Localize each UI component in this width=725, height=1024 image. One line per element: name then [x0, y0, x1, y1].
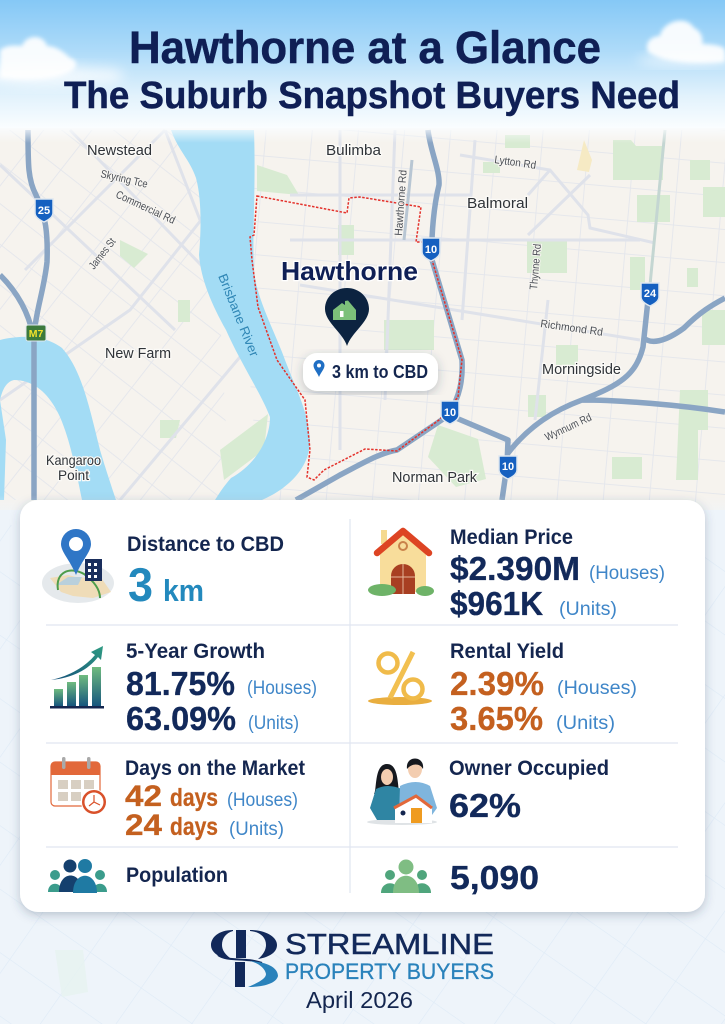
- stat: distance to CBD: km: [163, 573, 204, 608]
- stat: days on the market: (Houses): [227, 790, 298, 811]
- map labels: Bulimba: [326, 142, 382, 159]
- bottom background: [0, 495, 725, 1024]
- location pin: [325, 288, 369, 346]
- stat: days on the market: days: [170, 813, 218, 841]
- highway shields: 10: [425, 244, 437, 256]
- stat: owner occupied: Owner Occupied: [449, 757, 609, 780]
- map labels: Kangaroo: [46, 452, 101, 468]
- stat: distance to CBD: 3: [128, 558, 153, 611]
- stat: distance to CBD: Distance to CBD: [127, 533, 284, 556]
- callout: distance: 3 km to CBD: [332, 361, 428, 382]
- sky header: [0, 0, 725, 128]
- river: [171, 130, 310, 500]
- stat: 5-year growth: 5-Year Growth: [126, 640, 265, 663]
- stat: median price: Median Price: [450, 526, 573, 549]
- stat: median price: $961K: [450, 585, 543, 622]
- stat: 5-year growth: 81.75%: [126, 665, 235, 702]
- stat: distance to CBD: [42, 529, 284, 611]
- highway shields: M7: [29, 328, 43, 340]
- cloud left: [0, 37, 124, 87]
- logo wordmark: PROPERTY BUYERS: [285, 959, 494, 984]
- title: The Suburb Snapshot Buyers Need: [64, 75, 680, 117]
- map labels: Morningside: [542, 361, 621, 378]
- stat: population label: Population: [126, 864, 228, 887]
- highway shields: 10: [502, 461, 514, 473]
- stat: days on the market: Days on the Market: [125, 757, 305, 780]
- stat: owner occupied: 62%: [449, 787, 521, 824]
- date: April 2026: [306, 987, 413, 1013]
- stat: days on the market: [51, 757, 305, 842]
- highway shields: 10: [444, 407, 456, 419]
- map labels: [46, 142, 621, 486]
- panel: statistics card: [20, 500, 705, 912]
- map labels: Richmond Rd: [540, 318, 604, 339]
- stat: population label: [48, 859, 228, 893]
- map labels: Brisbane River: [215, 272, 262, 359]
- second river: [0, 337, 116, 500]
- logo wordmark: [285, 929, 494, 984]
- minor motorway: [650, 130, 665, 285]
- stat: median price: (Houses): [589, 563, 665, 584]
- map labels: Commercial Rd: [114, 189, 177, 227]
- highway shields: 24: [644, 288, 657, 300]
- stat: rental yield: (Units): [556, 713, 615, 734]
- map labels: Point: [58, 467, 89, 483]
- map labels: Lytton Rd: [494, 154, 537, 172]
- highway shields: 25: [38, 205, 50, 217]
- callout: distance: [303, 353, 438, 391]
- logo mark: [211, 930, 278, 987]
- stat: 5-year growth: [50, 640, 317, 737]
- stat: median price: (Units): [559, 599, 617, 620]
- map labels: Norman Park: [392, 469, 477, 486]
- stat: population value: [381, 859, 539, 896]
- map labels: James St: [87, 236, 119, 272]
- map section: [0, 125, 725, 510]
- map labels: Newstead: [87, 142, 152, 159]
- suburb label: Hawthorne: [281, 256, 418, 286]
- suburb boundary: [250, 196, 462, 480]
- map labels: Wynnum Rd: [543, 412, 594, 444]
- cloud right: [637, 21, 725, 66]
- stat: median price: $2.390M: [450, 550, 580, 587]
- stat: median price: [368, 526, 665, 622]
- map labels: Balmoral: [467, 195, 528, 212]
- stat: rental yield: Rental Yield: [450, 640, 564, 663]
- stat: 5-year growth: (Houses): [247, 678, 317, 699]
- title: [64, 22, 680, 117]
- main roads: [0, 130, 655, 500]
- stat: rental yield: 2.39%: [450, 665, 544, 702]
- stat: days on the market: days: [170, 784, 218, 812]
- stat: rental yield: [368, 640, 637, 737]
- parks: [120, 135, 725, 487]
- stat: rental yield: (Houses): [557, 678, 637, 699]
- highway shields: [26, 199, 659, 479]
- stat: rental yield: 3.65%: [450, 700, 543, 737]
- map labels: Skyring Tce: [99, 168, 149, 191]
- stat: 5-year growth: (Units): [248, 713, 299, 734]
- stat: owner occupied: [367, 757, 609, 825]
- highways: [0, 130, 725, 500]
- map labels: Thynne Rd: [528, 243, 544, 290]
- stat: days on the market: (Units): [229, 819, 284, 840]
- stat: days on the market: 24: [125, 809, 162, 842]
- logo wordmark: STREAMLINE: [285, 929, 494, 961]
- title: Hawthorne at a Glance: [129, 22, 601, 73]
- stat: population value: 5,090: [450, 859, 539, 896]
- stat: days on the market: 42: [125, 780, 162, 813]
- stat: 5-year growth: 63.09%: [126, 700, 236, 737]
- map labels: New Farm: [105, 345, 171, 362]
- map labels: Hawthorne Rd: [393, 170, 410, 236]
- top fade: [0, 125, 725, 143]
